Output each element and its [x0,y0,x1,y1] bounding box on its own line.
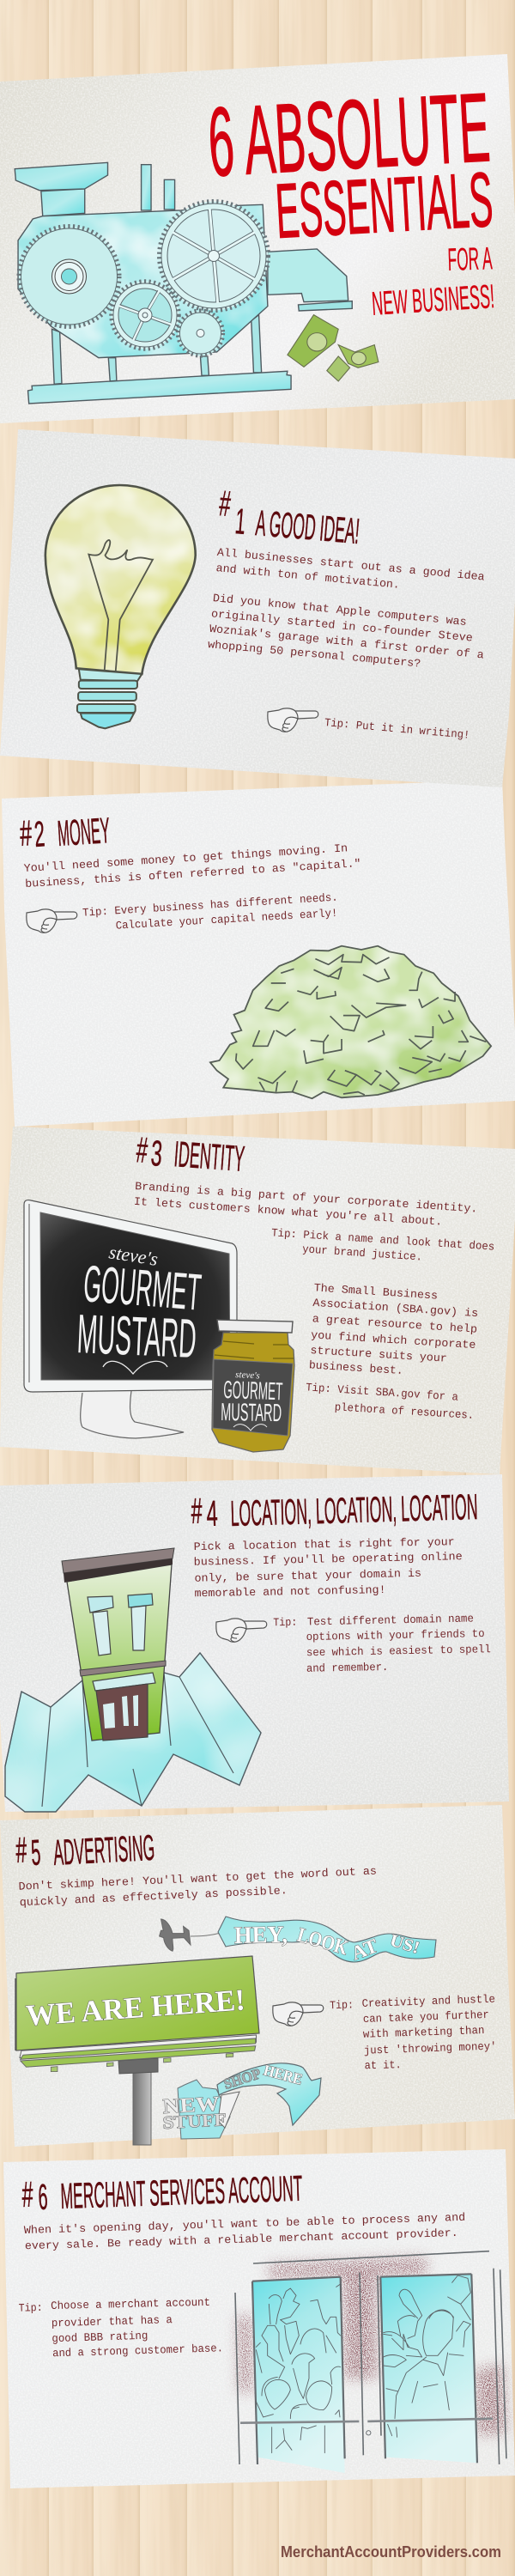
body text: Pick a location that is right for your [194,1535,455,1553]
machine hopper [15,162,175,216]
heading: #1 a good idea: # [218,483,233,524]
body text: business, this is often referred to as "capital." [25,857,361,890]
illustration: banner: HEY, [234,1922,288,1949]
body text: Branding is a big part of your corporate identity. [135,1180,478,1216]
icon: pointing hand [27,909,77,933]
illustration: machine with gears [15,162,379,404]
heading: #6 merchant services account: # [21,2174,34,2215]
body text: It lets customers know what you're all about. [134,1195,443,1229]
body text: whopping 50 personal computers? [208,638,421,671]
heading: #3 identity [135,1129,246,1179]
body text: quickly and as effectively as possible. [20,1884,288,1909]
illustration: shop here arrow and new stuff burst: SHOP [221,2065,263,2093]
tip: Calculate your capital needs early! [115,907,338,933]
heading: #6 merchant services account [21,2168,303,2217]
panel: 3 identity: IDENTITY [173,1133,246,1179]
illustration: store doors with crowd [235,2251,506,2473]
tip: Choose a merchant account [51,2296,210,2312]
illustration: monitor: steve's [107,1241,160,1270]
panel: 5 advertising [15,1827,497,2145]
heading: #1 a good idea: 1 [233,501,247,542]
illustration: banner: AT [348,1935,381,1965]
tip: with marketing than [363,2024,485,2041]
tip: Tip: Visit SBA.gov for a [306,1381,459,1404]
panel: 6 merchant services account [19,2168,506,2473]
tip [82,891,338,933]
illustration: building [62,1548,174,1741]
gear 4 [178,311,223,355]
tip: plethora of resources. [334,1400,475,1422]
panel: 2 money [19,810,491,1098]
money bills [288,315,379,381]
text block: small business association: The Small Business [313,1281,439,1303]
panel: 5 advertising: ADVERTISING [52,1827,155,1873]
illustration: billboard [15,1956,259,2145]
machine legs [52,315,262,384]
illustration: mustard jar: GOURMET [223,1376,283,1406]
text block: small business association: structure suits your [310,1344,447,1365]
tip: Tip: [330,1998,354,2012]
tip: and remember. [306,1661,388,1675]
illustration: mustard jar [212,1320,294,1452]
tip: Tip: Every business has different needs. [82,891,338,920]
gear 3 [112,282,179,349]
body text [208,546,485,671]
icon: pointing hand [273,2002,324,2026]
door handles [240,2419,493,2423]
spray paint shading [238,2257,506,2436]
text block: small business association: Association (SBA.gov) is [312,1297,479,1320]
illustration: money pile [210,946,491,1098]
illustration: shop here arrow and new stuff burst [162,2062,321,2139]
heading: #2 money: 2 [33,813,46,854]
title [205,73,495,323]
tip [273,1612,491,1675]
footer url: MerchantAccountProviders.com [281,2543,501,2561]
heading: #3 identity: # [135,1129,149,1170]
tip: at it. [365,2058,402,2072]
heading: #4 location [191,1486,478,1534]
body text: Don't skimp here! You'll want to get the word out as [18,1864,377,1893]
heading: #6 merchant services account: 6 [38,2177,48,2217]
text block: small business association: a great resource to help [312,1312,477,1336]
tip [306,1381,475,1422]
tip: can take you further [363,2008,489,2026]
illustration: banner: US! [388,1931,421,1958]
illustration: mustard jar: steve's [235,1370,260,1381]
panel: 1 a good idea [45,483,485,742]
illustration: mustard jar: MUSTARD [221,1399,282,1427]
tip [19,2296,223,2360]
panel: 2 money: MONEY [57,810,111,854]
illustration: monitor: GOURMET [82,1255,203,1321]
heading: #4 location: # [191,1491,203,1531]
text block: small business association [308,1281,479,1377]
tip: Tip: [19,2301,43,2315]
machine body [18,204,268,358]
illustration: monitor [24,1200,237,1438]
illustration: shop here arrow and new stuff burst: HERE [262,2062,305,2088]
tip: Tip: Put it in writing! [324,716,470,742]
heading: #5 advertising [15,1827,155,1873]
icon: light bulb [45,485,196,728]
tip: options with your friends to [306,1627,485,1643]
tip: good BBB rating [52,2330,148,2345]
icon: pointing hand [216,1619,267,1642]
body text: originally started in co-founder Steve [210,607,473,645]
tip: and a strong customer base. [52,2342,223,2360]
body text: and with ton of motivation. [215,562,400,592]
panel: 3 identity [24,1129,495,1452]
gear 2 [160,201,268,311]
text block: small business association: you find which corporate [311,1328,476,1352]
tip: provider that has a [52,2313,173,2330]
illustration: billboard: WE ARE HERE! [25,1983,246,2032]
machine base [28,371,291,404]
heading: #2 money [19,810,111,854]
door frames [235,2251,506,2464]
tip: Creativity and hustle [361,1993,495,2010]
panel: 1 a good idea: A GOOD IDEA! [254,502,361,551]
heading: #5 advertising: # [15,1829,28,1870]
heading: #5 advertising: 5 [30,1832,41,1873]
illustration: monitor: MUSTARD [76,1303,197,1370]
tip: your brand justice. [302,1242,422,1264]
illustration: banner [218,1917,436,1965]
body text: When it's opening day, you'll want to be able to process any and [24,2211,465,2237]
crowd of customers [256,2275,470,2453]
tip [330,1993,497,2072]
body text [194,1535,463,1600]
machine chute [268,249,352,311]
panel: 4 location [5,1486,491,1812]
tip: Test different domain name [307,1612,474,1628]
body text [24,2211,465,2252]
tip: just 'throwing money' [364,2040,497,2057]
tip: Tip: [273,1616,297,1629]
heading: #3 identity: 3 [149,1133,164,1174]
body text: You'll need some money to get things moving. In [23,841,348,875]
body text: Wozniak's garage with a first order of a [209,623,485,661]
body text [23,841,361,890]
text block: small business association: business best. [308,1358,403,1377]
illustration: shop here arrow and new stuff burst: STUFF [162,2109,227,2133]
body text [18,1864,377,1909]
heading: #2 money: # [19,812,33,854]
gear 1 [19,227,119,326]
heading: #1 a good idea [218,483,361,551]
illustration: shop here arrow and new stuff burst: NEW [162,2093,220,2118]
body text: memorable and not confusing! [194,1583,386,1600]
tip: see which is easiest to spell [306,1643,491,1659]
illustration: banner: LOOK [294,1924,350,1959]
icon: pointing hand [268,708,318,732]
body text: every sale. Be ready with a reliable merchant account provider. [25,2227,458,2252]
heading: #4 location: 4 [206,1493,218,1534]
body text: only, be sure that your domain is [194,1567,421,1585]
icon: airplane [160,1919,218,1951]
illustration: map [5,1653,261,1812]
tip: Tip: Pick a name and look that does [271,1226,495,1254]
body text: All businesses start out as a good idea [216,546,485,584]
body text: Did you know that Apple computers was [212,592,467,629]
store windows [252,2274,478,2473]
body text: business. If you'll be operating online [194,1550,463,1569]
